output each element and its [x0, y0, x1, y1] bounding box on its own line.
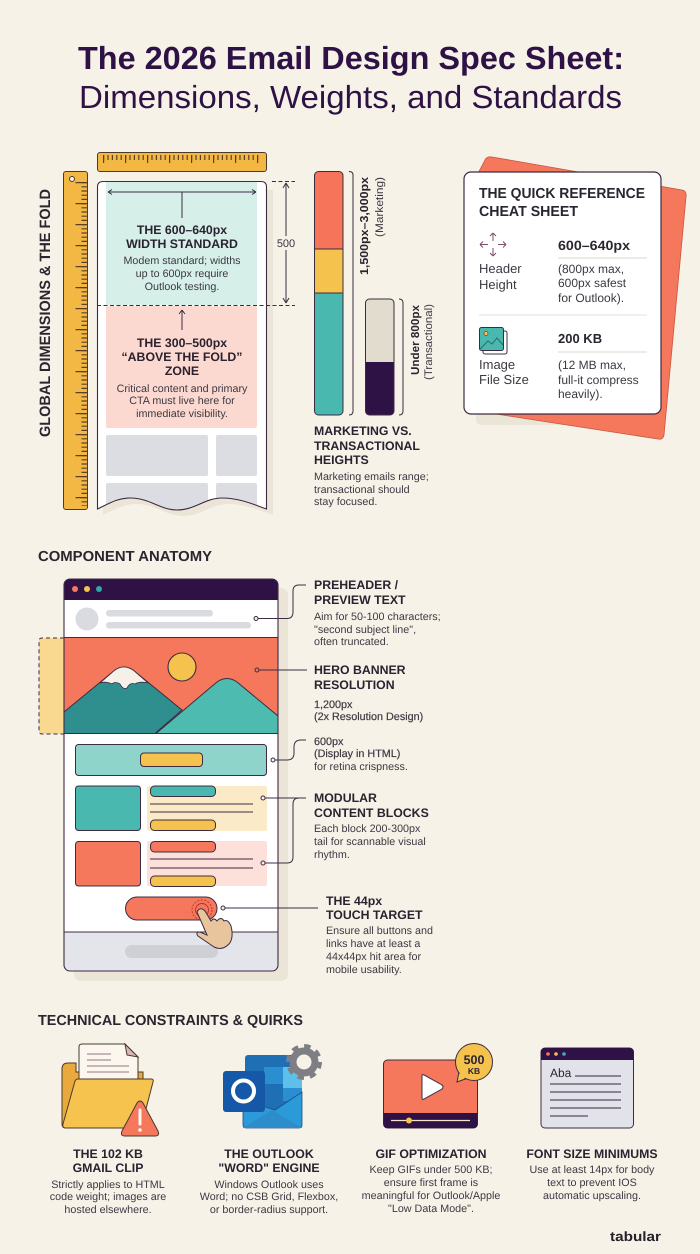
zone: width standard: Outlook testing. — [145, 281, 219, 293]
section heading: global dimensions and the fold: GLOBAL DIMENSIONS & THE FOLD — [37, 189, 54, 437]
modular block two — [76, 841, 267, 886]
row: header height — [479, 238, 647, 305]
hero banner image — [64, 638, 278, 734]
section heading: component anatomy: COMPONENT ANATOMY — [38, 549, 212, 565]
text: outlook word engine: Word; no CSB Grid, Flexbox, — [200, 1191, 338, 1203]
row: image file size: File Size — [479, 372, 529, 387]
hero bleed area — [39, 638, 64, 734]
logo: tabular: tabular — [610, 1229, 662, 1244]
icon: resize arrows — [480, 233, 506, 256]
connector lines — [221, 585, 318, 910]
callout: hero banner resolution: 1,200px — [314, 699, 353, 711]
email outline — [98, 182, 266, 510]
bar: transactional height: Under 800px — [410, 304, 422, 375]
zone: above the fold: CTA must live here for — [129, 395, 235, 407]
row: image file size: (12 MB max, — [558, 358, 626, 372]
text: heights caption: TRANSACTIONAL — [314, 439, 420, 453]
title — [78, 40, 624, 115]
text: outlook word engine: THE OUTLOOK — [224, 1147, 314, 1161]
callout: touch target: TOUCH TARGET — [326, 908, 423, 922]
callout: modular content blocks: Each block 200-300px — [314, 823, 421, 835]
bar: transactional height: (Transactional) — [423, 304, 435, 380]
callout: modular content blocks: MODULAR — [314, 791, 377, 805]
icon: folder with warning — [62, 1044, 159, 1136]
text: gmail clip — [50, 1147, 166, 1216]
badge: 500 — [464, 1053, 484, 1067]
callout: preheader — [314, 578, 441, 648]
callout: touch target: THE 44px — [326, 894, 382, 908]
text: gif optimization: ensure first frame is — [384, 1177, 478, 1189]
row: header height: 600px safest — [558, 276, 627, 290]
callout: hero banner resolution — [314, 663, 423, 723]
row: image file size: Image — [479, 357, 515, 372]
callout: modular content blocks: tail for scannable visual — [314, 836, 426, 848]
text: gif optimization — [362, 1147, 500, 1215]
CTA button with tap hand — [126, 897, 232, 948]
section heading: technical constraints: TECHNICAL CONSTRAINTS & QUIRKS — [38, 1013, 303, 1029]
zone: width standard — [106, 182, 257, 305]
badge: KB — [468, 1066, 480, 1076]
text: font size minimums: Use at least 14px for body — [530, 1164, 655, 1176]
chart: marketing vs transactional heights — [314, 172, 435, 508]
bar: transactional height — [366, 299, 435, 415]
text: heights caption: HEIGHTS — [314, 453, 369, 467]
callout: modular content blocks — [314, 791, 429, 861]
zone: above the fold: immediate visibility. — [136, 408, 228, 420]
callout: hero banner resolution: RESOLUTION — [314, 678, 395, 692]
card heading — [479, 186, 645, 220]
row: image file size — [479, 331, 647, 401]
text: outlook word engine: Windows Outlook uses — [214, 1179, 324, 1191]
bar: marketing height: (Marketing) — [374, 177, 386, 237]
hero band with button — [76, 744, 266, 776]
callout: preheader: "second subject line", — [314, 624, 416, 636]
zone: width standard: up to 600px require — [136, 268, 228, 280]
zone: width standard: WIDTH STANDARD — [126, 237, 238, 251]
text: gmail clip: code weight; images are — [50, 1191, 166, 1203]
icon: font size window — [541, 1048, 634, 1128]
zone: above the fold — [106, 306, 257, 428]
badge — [456, 1044, 492, 1082]
text: heights caption: transactional should — [314, 484, 410, 496]
text: gif optimization: meaningful for Outlook/Apple — [362, 1190, 500, 1202]
icon: video player with file size badge — [384, 1044, 492, 1128]
icon: font size window: Aba — [550, 1066, 572, 1080]
text: outlook word engine — [200, 1147, 338, 1216]
preheader row — [76, 608, 251, 630]
text: font size minimums: text to prevent IOS — [547, 1177, 637, 1189]
text: outlook word engine: "WORD" ENGINE — [218, 1161, 320, 1175]
text: heights caption: Marketing emails range; — [314, 471, 429, 483]
zone: above the fold: Critical content and primary — [117, 383, 248, 395]
callout: preheader: PREVIEW TEXT — [314, 593, 406, 607]
callout: 600px display — [314, 736, 408, 773]
row: header height: 600–640px — [558, 238, 631, 253]
icon: vertical ruler — [64, 172, 88, 510]
zone: above the fold: THE 300–500px — [137, 336, 227, 350]
callout: hero banner resolution: HERO BANNER — [314, 663, 406, 677]
text: heights caption — [314, 424, 429, 508]
zone: above the fold: ZONE — [165, 364, 199, 378]
callout: hero banner resolution: (2x Resolution Design) — [314, 711, 423, 723]
text: gmail clip: THE 102 KB — [73, 1147, 143, 1161]
text: font size minimums: FONT SIZE MINIMUMS — [526, 1147, 658, 1161]
row: image file size: full-it compress — [558, 373, 639, 387]
row: image file size: 200 KB — [558, 331, 602, 346]
text: gmail clip: hosted elsewhere. — [64, 1204, 152, 1216]
panel: quick reference cheat sheet — [464, 157, 686, 439]
text: gmail clip: Strictly applies to HTML — [51, 1179, 165, 1191]
browser header bar — [64, 579, 278, 600]
callout: preheader: PREHEADER / — [314, 578, 399, 592]
bar: marketing height — [314, 172, 386, 415]
callout: 600px display: (Display in HTML) — [314, 748, 400, 760]
callout: 600px display: for retina crispness. — [314, 761, 408, 773]
callout: touch target: Ensure all buttons and — [326, 925, 433, 937]
callout: touch target: links have at least a — [326, 938, 420, 950]
bar: marketing height: 1,500px–3,000px — [359, 176, 371, 275]
row: image file size: heavily). — [558, 387, 603, 401]
icon: horizontal ruler — [98, 152, 266, 172]
callout: modular content blocks: CONTENT BLOCKS — [314, 806, 429, 820]
text: gif optimization: "Low Data Mode". — [388, 1203, 474, 1215]
row: header height: Header — [479, 261, 522, 276]
dimension arrow: 500: 500 — [277, 238, 295, 250]
text: font size minimums — [526, 1147, 658, 1202]
callout: modular content blocks: rhythm. — [314, 849, 350, 861]
text: gif optimization: Keep GIFs under 500 KB; — [369, 1164, 493, 1176]
callout: preheader: often truncated. — [314, 636, 389, 648]
text: outlook word engine: or border-radius support. — [210, 1204, 328, 1216]
icon: outlook word engine — [223, 1046, 320, 1128]
card heading: THE QUICK REFERENCE — [479, 186, 645, 202]
text: font size minimums: automatic upscaling. — [543, 1190, 641, 1202]
callout: preheader: Aim for 50-100 characters; — [314, 611, 441, 623]
callout: touch target: 44x44px hit area for — [326, 951, 421, 963]
callout: touch target — [326, 894, 433, 976]
footer — [64, 932, 278, 971]
zone: width standard: THE 600–640px — [137, 223, 227, 237]
panel: email component mockup — [39, 579, 288, 981]
dimension arrow: 500 — [272, 182, 295, 303]
text: heights caption: stay focused. — [314, 496, 377, 508]
icon: image stack — [480, 328, 507, 354]
title: The 2026 Email Design Spec Sheet: — [78, 40, 624, 76]
modular block one — [76, 786, 267, 831]
zone: width standard: Modem standard; widths — [123, 255, 241, 267]
text: heights caption: MARKETING VS. — [314, 424, 412, 438]
card heading: CHEAT SHEET — [479, 204, 578, 220]
fold line — [97, 304, 295, 306]
panel: email width and fold diagram — [97, 182, 295, 516]
text: gmail clip: GMAIL CLIP — [73, 1161, 143, 1175]
callout: 600px display: 600px — [314, 736, 344, 748]
row: header height: (800px max, — [558, 262, 624, 276]
title: Dimensions, Weights, and Standards — [79, 79, 622, 115]
row: header height: for Outlook). — [558, 291, 624, 305]
zone: above the fold: “ABOVE THE FOLD” — [122, 350, 242, 364]
placeholder content blocks — [106, 435, 257, 513]
callout: touch target: mobile usability. — [326, 964, 402, 976]
text: gif optimization: GIF OPTIMIZATION — [375, 1147, 487, 1161]
row: header height: Height — [479, 277, 517, 292]
